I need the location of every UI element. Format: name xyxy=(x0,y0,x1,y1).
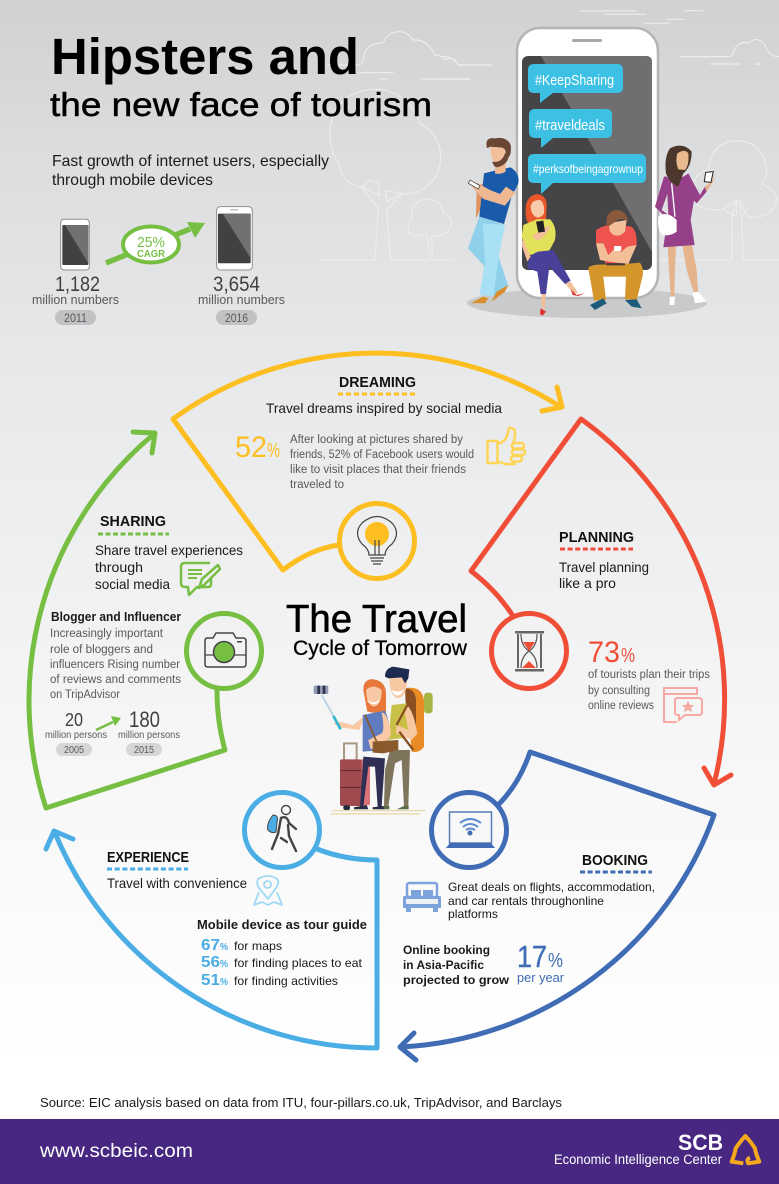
stat: 52%: 52 xyxy=(235,431,267,464)
hashtag bubble: KeepSharing: #KeepSharing xyxy=(535,72,614,89)
stat: 2016 users: 3,654 xyxy=(213,273,260,296)
organization name: Economic Intelligence Center xyxy=(554,1152,722,1167)
icon: hourglass xyxy=(492,614,566,688)
arrow: yellow cycle segment xyxy=(173,353,562,570)
stat: 20 million persons 2005: 2005 xyxy=(64,745,84,756)
icon: large phone 2016 xyxy=(217,207,252,270)
illustration: couple taking selfie xyxy=(314,667,433,814)
list: mobile device uses: % xyxy=(220,977,228,988)
stat: 2016 users xyxy=(198,273,285,325)
list: mobile device uses: for maps xyxy=(234,939,282,953)
text: booking description: platforms xyxy=(448,907,498,921)
hashtag bubble: perksofbeingagrownup xyxy=(528,154,646,194)
center title xyxy=(286,598,468,660)
icon: online review xyxy=(664,688,702,722)
stat: 180 million persons 2015: million persons xyxy=(118,729,180,741)
website url: www.scbeic.com xyxy=(39,1141,193,1162)
stat: 17% per year: 17 xyxy=(517,939,547,974)
subtitle text: Fast growth of internet users, especially xyxy=(52,153,329,170)
text: dreaming description: traveled to xyxy=(290,479,344,491)
text: online booking projection: in Asia-Pacific xyxy=(403,958,484,972)
organization name: SCB xyxy=(678,1130,723,1155)
icon: comment with pencil xyxy=(181,563,220,595)
arrow: light blue cycle segment xyxy=(46,831,377,1048)
text: booking description xyxy=(448,880,655,921)
ground shadow xyxy=(467,288,707,318)
stat: 2011 users: 2011 xyxy=(64,313,87,325)
text: blogger and influencer: Increasingly important xyxy=(50,628,164,640)
person: man in blue shirt xyxy=(468,138,519,303)
text: planning subtitle: like a pro xyxy=(559,575,616,591)
heading: booking: BOOKING xyxy=(582,852,648,869)
arrow: green cycle segment xyxy=(29,432,225,808)
stat: 180 million persons 2015: 180 xyxy=(129,707,160,732)
text: blogger and influencer: role of bloggers and xyxy=(50,644,153,656)
callout: 25% CAGR: 25% xyxy=(137,234,165,251)
text: experience subtitle: Travel with convenience xyxy=(107,875,247,891)
callout: 25% CAGR xyxy=(123,226,179,262)
title: the new face of tourism xyxy=(50,86,432,123)
text: dreaming description: After looking at pictures shared by xyxy=(290,434,463,446)
stat: 180 million persons 2015: 2015 xyxy=(134,745,154,756)
callout: 25% CAGR: CAGR xyxy=(137,248,165,260)
list: mobile device uses xyxy=(201,937,363,989)
stat: 2016 users: 2016 xyxy=(225,313,248,325)
subtitle text: through mobile devices xyxy=(52,172,213,189)
icon: small phone 2011 xyxy=(61,219,89,270)
list: mobile device uses: 67 xyxy=(201,937,220,954)
stat: 73%: 73 xyxy=(588,636,620,669)
organization name xyxy=(554,1130,723,1167)
icon: SCB logo xyxy=(732,1136,759,1163)
icon: camera xyxy=(186,614,262,688)
list: mobile device uses: 56 xyxy=(201,954,220,971)
text: planning description: of tourists plan their trips xyxy=(588,669,710,681)
title: Hipsters and xyxy=(51,28,359,85)
text: dreaming subtitle: Travel dreams inspired by social media xyxy=(266,400,502,416)
text: planning subtitle xyxy=(559,559,649,591)
stat: 2016 users: million numbers xyxy=(198,293,285,307)
hashtag bubble: traveldeals: #traveldeals xyxy=(535,117,605,134)
list: mobile device uses: for finding activities xyxy=(234,974,338,988)
icon: thumbs up xyxy=(488,428,525,464)
text: dreaming description: like to visit places that their friends xyxy=(290,464,466,476)
text: mobile device heading: Mobile device as tour guide xyxy=(197,917,367,932)
text: sharing subtitle: through xyxy=(95,559,143,575)
stat: 2011 users: 1,182 xyxy=(55,273,100,296)
panel: mobile user growth xyxy=(32,207,285,325)
heading: sharing: SHARING xyxy=(100,513,166,530)
stat: 20 million persons 2005 xyxy=(45,710,107,756)
hashtag bubble: KeepSharing xyxy=(528,64,623,103)
text: planning subtitle: Travel planning xyxy=(559,559,649,575)
arrow: red cycle segment xyxy=(471,419,731,785)
hashtag bubble: traveldeals xyxy=(529,109,612,148)
text: online booking projection: Online booking xyxy=(403,943,490,957)
heading: dreaming: DREAMING xyxy=(339,374,416,391)
arrow: bloggers growth xyxy=(96,716,121,730)
text: booking description: Great deals on flights, accommodation, xyxy=(448,880,655,894)
text: blogger and influencer xyxy=(50,609,181,701)
text: online booking projection: projected to grow xyxy=(403,973,510,987)
icon: bed xyxy=(403,883,441,912)
text: blogger and influencer: on TripAdvisor xyxy=(50,689,120,701)
person: man in red shirt xyxy=(588,210,643,310)
panel: sharing xyxy=(29,432,261,808)
stat: 20 million persons 2005: 20 xyxy=(65,710,83,730)
text: blogger and influencer: Blogger and Influencer xyxy=(51,609,181,624)
hashtag bubble: perksofbeingagrownup: #perksofbeingagrownup xyxy=(533,162,643,176)
text: planning description xyxy=(588,669,710,712)
text: planning description: by consulting xyxy=(588,685,650,697)
panel: dreaming xyxy=(173,353,562,578)
text: sharing subtitle: Share travel experiences xyxy=(95,542,243,558)
icon: laptop with wifi xyxy=(432,792,506,868)
panel: experience xyxy=(46,792,377,1048)
text: booking description: and car rentals throughonline xyxy=(448,894,604,908)
panel: planning xyxy=(471,419,731,785)
text: blogger and influencer: of reviews and comments xyxy=(50,674,181,686)
stat: 2011 users: million numbers xyxy=(32,293,119,307)
heading: planning: PLANNING xyxy=(559,529,634,546)
text: sharing subtitle xyxy=(95,542,243,592)
phone body xyxy=(517,28,658,298)
stat: 73%: % xyxy=(621,645,635,667)
list: mobile device uses: 51 xyxy=(201,972,220,989)
list: mobile device uses: for finding places to eat xyxy=(234,956,363,970)
stat: 180 million persons 2015 xyxy=(118,707,180,756)
stat: 17% per year xyxy=(517,939,565,985)
text: blogger and influencer: influencers Rising number xyxy=(50,659,180,671)
footer xyxy=(0,1119,779,1184)
text: online booking projection xyxy=(403,943,510,987)
icon: map pin xyxy=(254,876,282,905)
arrow: blue cycle segment xyxy=(400,752,714,1060)
source note: Source: EIC analysis based on data from ITU, four-pillars.co.uk, TripAdvisor, and Barclays xyxy=(40,1095,562,1110)
text: sharing subtitle: social media xyxy=(95,576,170,592)
list: mobile device uses: % xyxy=(220,959,228,970)
person: woman in purple dress xyxy=(655,146,715,305)
stat: 2011 users xyxy=(32,273,119,325)
panel: booking xyxy=(400,752,714,1060)
stat: 17% per year: per year xyxy=(517,970,565,985)
text: dreaming description xyxy=(290,434,474,491)
heading: experience: EXPERIENCE xyxy=(107,849,189,866)
title xyxy=(50,28,432,123)
subtitle text xyxy=(52,153,329,189)
text: dreaming description: friends, 52% of Facebook users would xyxy=(290,449,474,461)
stat: 52%: % xyxy=(267,440,280,462)
illustration: giant phone with people xyxy=(467,28,715,318)
stat: 17% per year: % xyxy=(548,950,563,972)
text: planning description: online reviews xyxy=(588,700,654,712)
icon: hiker xyxy=(244,792,320,868)
center title: The Travel xyxy=(286,598,467,641)
icon: light bulb xyxy=(340,504,414,578)
stat: 20 million persons 2005: million persons xyxy=(45,729,107,741)
person: woman with red hair xyxy=(522,194,585,316)
list: mobile device uses: % xyxy=(220,942,228,953)
center title: Cycle of Tomorrow xyxy=(293,637,468,660)
arrow: growth xyxy=(106,222,205,263)
